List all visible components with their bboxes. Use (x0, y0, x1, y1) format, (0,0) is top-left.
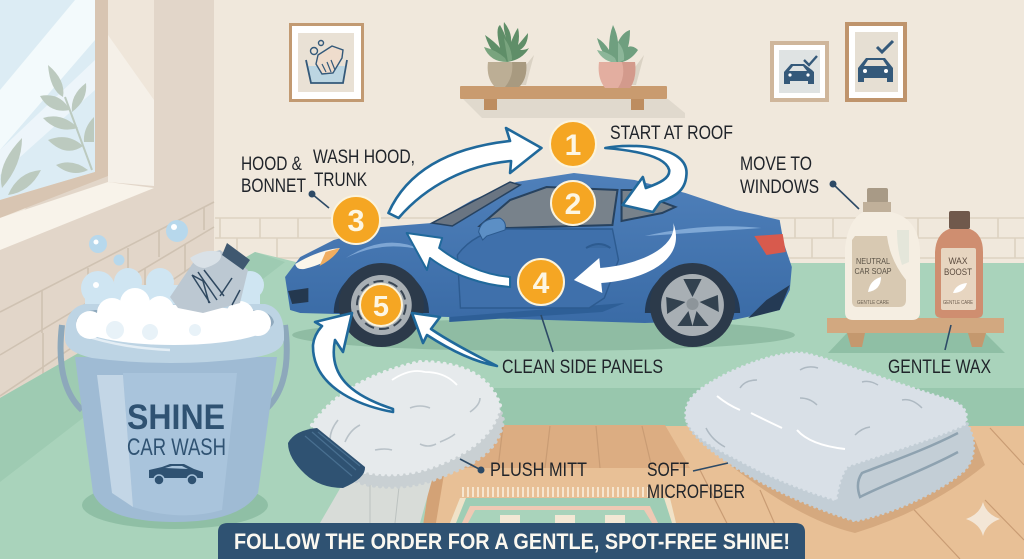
pointer: windows (830, 180, 859, 209)
pointer: hood (308, 190, 329, 208)
car body (285, 173, 792, 323)
glove (170, 243, 250, 313)
pointer: mitt (460, 459, 484, 474)
soap label text: GENTLE CARE (857, 300, 889, 306)
soap shelf (827, 318, 1005, 353)
car ground shadow (292, 319, 795, 351)
side wall bricks (0, 202, 214, 396)
wax label text: GENTLE CARE (943, 300, 974, 306)
floor (0, 252, 1024, 559)
towel lower layer (688, 420, 974, 521)
wash mitt (288, 362, 503, 523)
arrow: from step 4 to front (407, 233, 510, 287)
plant right (597, 25, 644, 88)
label: plush mitt: PLUSH MITT (490, 460, 587, 481)
label: move to windows: MOVE TO (740, 154, 812, 175)
wax label text: WAX (948, 256, 968, 266)
microfiber towel (686, 353, 985, 533)
mitt shadow (320, 480, 432, 523)
wax label text: BOOST (944, 267, 972, 277)
headlight (295, 248, 340, 269)
label: hood and bonnet (241, 154, 306, 197)
bucket text: shine: SHINE (127, 398, 225, 437)
step 5 badge (360, 284, 402, 326)
wall frame: large car check (845, 22, 907, 102)
wax bottle (935, 211, 983, 318)
bottom banner (218, 523, 805, 559)
soap label text: CAR SOAP (854, 266, 892, 276)
window reveal (108, 0, 154, 185)
towel fold (858, 433, 958, 497)
arrow: mitt to wheel (313, 313, 393, 412)
step 3 badge: 3 (347, 203, 365, 238)
label: hood and bonnet: HOOD & (241, 154, 302, 175)
bucket (61, 220, 287, 529)
label: soft microfiber (647, 460, 745, 503)
bucket body (75, 357, 277, 522)
mitt cuff (288, 428, 365, 488)
window frame (0, 0, 108, 218)
back wall bricks (215, 218, 1024, 258)
step 4 badge (518, 259, 564, 305)
arrow: into step 4 (574, 223, 676, 293)
step 1 badge: 1 (565, 129, 581, 162)
sparkle mark (966, 502, 1000, 536)
pointer: side panels (541, 315, 553, 352)
bucket rim (65, 304, 284, 363)
step 4 badge: 4 (533, 267, 550, 300)
label: wash hood, trunk: WASH HOOD, (313, 147, 415, 168)
glass reflection (0, 0, 95, 150)
front grille (288, 288, 308, 304)
arrow: step 1 to step 2 (605, 146, 687, 212)
rear wheel (650, 263, 735, 347)
label: wash hood, trunk (313, 147, 415, 191)
bottom banner: FOLLOW THE ORDER FOR A GENTLE, SPOT-FREE SHINE! (234, 529, 790, 554)
soap label text: NEUTRAL (856, 256, 890, 266)
label: soft microfiber: MICROFIBER (647, 482, 745, 503)
soap bottle (845, 188, 920, 320)
plant shelf (460, 22, 685, 118)
tail light (754, 234, 786, 255)
window sill (0, 182, 154, 250)
bucket car icon (149, 464, 203, 485)
bucket handle (61, 325, 287, 410)
window (0, 0, 154, 250)
arrow: label to wheel (412, 313, 497, 366)
label: start at roof: START AT ROOF (610, 123, 733, 144)
windshield (432, 182, 520, 226)
plant left (484, 22, 534, 87)
white foam (76, 288, 271, 345)
front wheel (339, 263, 424, 347)
wood floor (418, 426, 1024, 559)
label: wash hood, trunk: TRUNK (314, 170, 367, 191)
label: move to windows: WINDOWS (740, 177, 819, 198)
plant outside the window (1, 65, 94, 195)
step 3 badge (332, 196, 380, 244)
step 2 badge: 2 (565, 188, 581, 221)
bucket text: car wash: CAR WASH (127, 434, 226, 461)
wall frame: hand washing (289, 23, 364, 102)
wheel arches (334, 266, 429, 313)
step 2 badge (551, 181, 595, 225)
side mirror (479, 218, 505, 240)
side wall (0, 0, 214, 400)
label: hood and bonnet: BONNET (241, 176, 306, 197)
bucket shadow (82, 481, 268, 529)
side window (480, 187, 617, 228)
label: gentle wax: GENTLE WAX (888, 357, 991, 378)
step 5 badge: 5 (373, 291, 389, 323)
label: soft microfiber: SOFT (647, 460, 689, 481)
soap bubbles (89, 220, 188, 288)
rug (450, 492, 676, 523)
car (285, 173, 795, 351)
label: clean side panels: CLEAN SIDE PANELS (502, 357, 663, 378)
label: move to windows (740, 154, 819, 198)
door outline (457, 229, 619, 308)
pointer: microfiber (693, 463, 728, 471)
rear window (622, 190, 675, 221)
wax label text (943, 256, 974, 306)
soap label text (854, 256, 892, 306)
towel shadow (730, 440, 985, 533)
wall frame: small car check (770, 41, 829, 102)
towel top layer (686, 353, 966, 500)
arrow: step 3 to step 1 (388, 128, 541, 218)
blue foam (81, 268, 264, 320)
bucket highlight strip (97, 375, 133, 507)
pointer: wax (945, 325, 951, 350)
step 1 badge (550, 121, 596, 167)
